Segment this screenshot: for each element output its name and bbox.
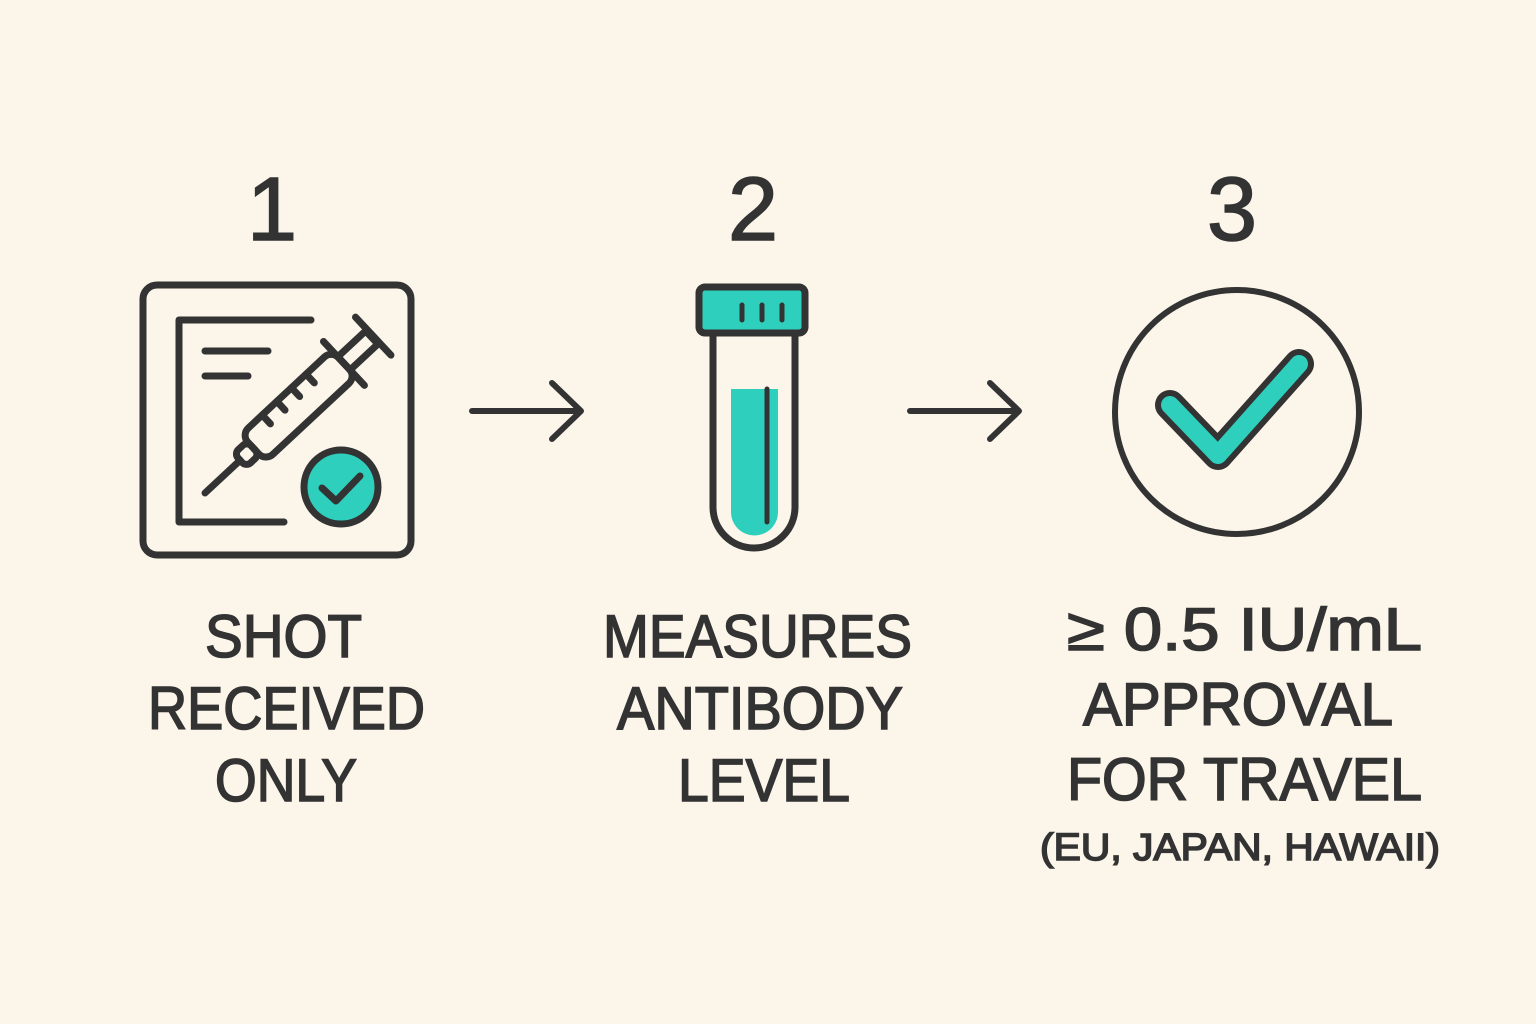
text: step 3 label: (EU, JAPAN, HAWAII) <box>1040 827 1440 869</box>
icon: teal check badge <box>304 450 378 524</box>
arrow 2 <box>910 383 1019 439</box>
arrow 1 <box>472 383 581 439</box>
text: step 1 label: ONLY <box>215 747 357 814</box>
icon: approval check circle <box>1115 290 1359 534</box>
text: step 3 label: APPROVAL <box>1083 671 1393 738</box>
text: step 1 label: RECEIVED <box>148 675 425 742</box>
text: step 3 label <box>1040 596 1440 869</box>
text: step 2 label <box>603 603 912 814</box>
icon: test tube <box>699 287 805 548</box>
text: step 1 label <box>148 603 425 814</box>
text: step 2 label: LEVEL <box>678 747 850 814</box>
text: step 3 label: ≥ 0.5 IU/mL <box>1067 596 1422 663</box>
step 3 number: 3 <box>1207 160 1257 260</box>
text: step 2 label: ANTIBODY <box>617 675 903 742</box>
step 1 number: 1 <box>247 160 297 260</box>
step 2 number: 2 <box>728 160 778 260</box>
text: step 3 label: FOR TRAVEL <box>1067 746 1422 813</box>
icon: vaccination certificate with syringe <box>143 285 411 555</box>
text: step 2 label: MEASURES <box>603 603 912 670</box>
text: step 1 label: SHOT <box>205 603 362 670</box>
